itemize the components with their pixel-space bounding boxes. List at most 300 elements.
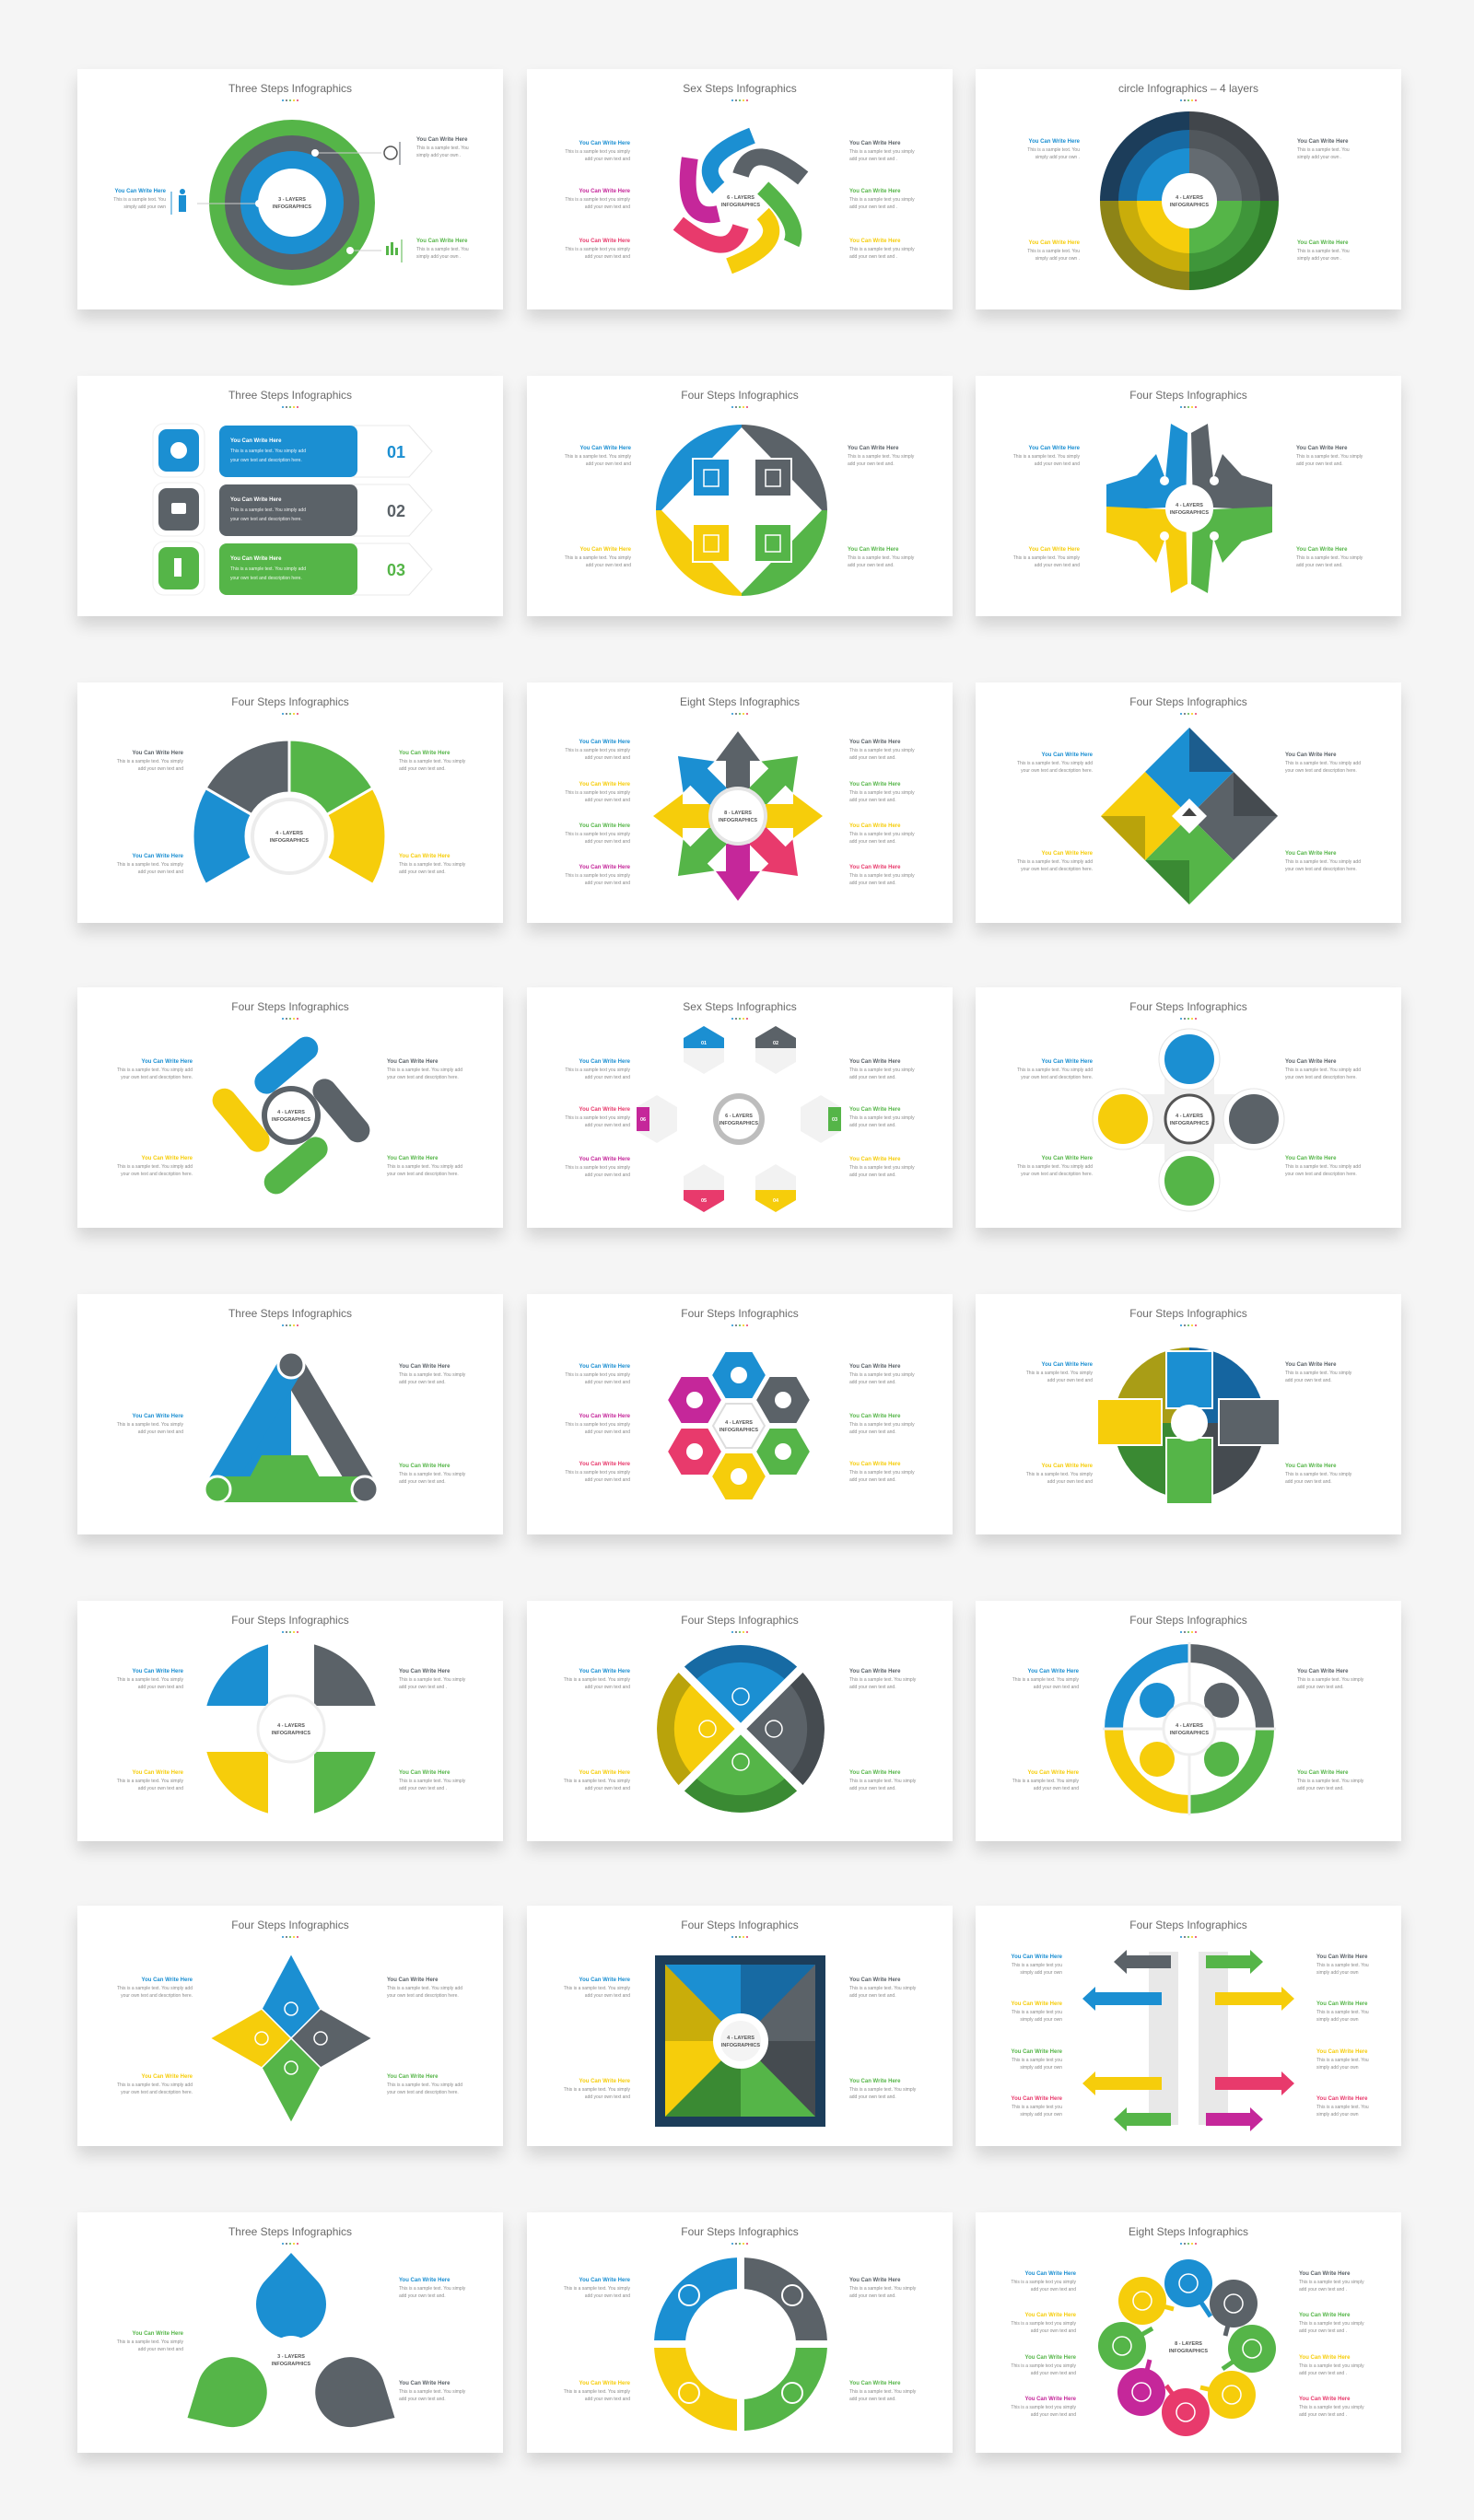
text blocks right: This is a sample text. You: [1316, 2058, 1369, 2063]
text blocks right: You Can Write Here: [387, 1156, 439, 1161]
title: [683, 82, 797, 101]
text blocks right: You Can Write Here: [387, 2074, 439, 2080]
ring chart: [197, 120, 381, 286]
pinwheel chart: [1106, 424, 1272, 593]
hexagon chart: 04: [773, 1198, 779, 1204]
text blocks right: your own text and description here.: [387, 1075, 459, 1080]
donut chart: INFOGRAPHICS: [270, 838, 309, 844]
text blocks right: your own text and description here.: [1285, 867, 1357, 872]
text blocks right: add your own text and.: [849, 1477, 896, 1483]
text blocks left: [565, 740, 631, 886]
text blocks right: add your own text and.: [1285, 1378, 1332, 1383]
title: [228, 389, 352, 408]
title: Three Steps Infographics: [228, 1307, 352, 1320]
text blocks left: [564, 2278, 631, 2402]
text blocks left: You Can Write Here: [1029, 547, 1081, 553]
donut chart: INFOGRAPHICS: [1170, 1731, 1209, 1736]
text blocks right: This is a sample text. You simply add: [387, 1164, 462, 1170]
text blocks right: You Can Write Here: [399, 1770, 450, 1776]
pills chart: INFOGRAPHICS: [272, 1117, 310, 1123]
step 3: [153, 542, 432, 595]
text blocks right: This is a sample text. You simply: [399, 1472, 466, 1477]
text blocks left: add your own text and: [138, 869, 183, 875]
text blocks left: This is a sample text. You simply: [565, 555, 631, 561]
slide 22: three drops: [77, 2212, 503, 2453]
text blocks right: add your own text and .: [1299, 2371, 1347, 2376]
text blocks right: add your own text and.: [1296, 461, 1343, 467]
text blocks right: This is a sample text you simply: [849, 149, 915, 155]
title: [1129, 1307, 1247, 1326]
text blocks right: This is a sample text. You simply: [849, 1677, 917, 1683]
text blocks left: You Can Write Here: [1028, 1770, 1080, 1776]
title: [1129, 2225, 1248, 2245]
text blocks left: This is a sample text. You simply: [564, 2389, 630, 2395]
donut chart: [193, 740, 386, 884]
hexagon chart: INFOGRAPHICS: [719, 1121, 758, 1126]
text blocks right: [849, 1364, 915, 1483]
text blocks left: [564, 1669, 631, 1791]
text blocks right: simply add your own: [1316, 1970, 1359, 1976]
text blocks right: You Can Write Here: [387, 1059, 439, 1065]
title: Four Steps Infographics: [231, 1614, 349, 1627]
text blocks left: add your own text and: [138, 1685, 183, 1690]
text blocks right: You Can Write Here: [849, 2079, 901, 2084]
slide 18: donut with circles: [976, 1601, 1401, 1841]
text blocks left: This is a sample text you simply: [565, 1068, 630, 1073]
text blocks left: This is a sample text. You simply add: [1017, 859, 1093, 865]
title: [228, 1307, 352, 1326]
text blocks left: This is a sample text you simply: [565, 149, 630, 155]
text blocks right: This is a sample text. You simply: [848, 454, 915, 460]
title: [681, 1307, 799, 1326]
text blocks left: You Can Write Here: [142, 1156, 193, 1161]
text blocks right: You Can Write Here: [849, 1669, 901, 1674]
petals chart: 4 - LAYERS: [277, 1723, 305, 1729]
donut chart: [650, 2254, 831, 2434]
text blocks right: This is a sample text. You simply: [849, 2087, 917, 2093]
text blocks right: add your own text and.: [849, 1429, 896, 1435]
text blocks left: add your own text and: [585, 157, 630, 162]
text blocks right: You Can Write Here: [399, 1669, 450, 1674]
text blocks left: This is a sample text you simply: [565, 1165, 630, 1171]
text blocks left: your own text and description here.: [121, 1993, 193, 1999]
text blocks right: You Can Write Here: [848, 446, 899, 451]
text blocks left: You Can Write Here: [579, 1770, 631, 1776]
step 3: 03: [387, 561, 405, 579]
text blocks right: add your own text and.: [1297, 1685, 1344, 1690]
text blocks right: This is a sample text you simply: [849, 1372, 915, 1378]
text blocks right: This is a sample text. You: [1316, 2010, 1369, 2015]
text blocks right: add your own text and.: [849, 798, 896, 803]
text blocks right: This is a sample text. You: [1297, 147, 1350, 153]
text blocks right: You Can Write Here: [849, 1978, 901, 1983]
pills chart: [207, 1032, 375, 1199]
text blocks right: You Can Write Here: [1316, 1954, 1368, 1960]
swirl chart: 6 - LAYERS: [727, 195, 755, 201]
text blocks left: add your own text and: [585, 2397, 630, 2402]
text blocks right: You Can Write Here: [1299, 2313, 1351, 2318]
text blocks right: add your own text and.: [849, 881, 896, 886]
text blocks right: This is a sample text. You simply add: [1285, 761, 1361, 766]
hexagon chart: 06: [640, 1117, 646, 1123]
text blocks right: You Can Write Here: [849, 740, 901, 745]
text blocks right: You Can Write Here: [1297, 139, 1349, 145]
text blocks left: [1011, 2271, 1077, 2418]
text blocks right: This is a sample text. You simply add: [1285, 859, 1361, 865]
title: Eight Steps Infographics: [1129, 2225, 1248, 2238]
text blocks right: [1316, 1954, 1369, 2118]
text blocks right: You Can Write Here: [849, 1364, 901, 1370]
text blocks left: your own text and description here.: [1021, 1075, 1093, 1080]
text blocks right: This is a sample text you simply: [849, 748, 915, 753]
title: Sex Steps Infographics: [683, 82, 797, 95]
text blocks left: You Can Write Here: [1012, 2096, 1063, 2102]
text blocks right: This is a sample text you simply: [1299, 2280, 1364, 2285]
arrows chart: INFOGRAPHICS: [719, 818, 757, 823]
text blocks left: add your own text and: [585, 2293, 630, 2299]
text blocks right: add your own text and.: [1297, 1786, 1344, 1791]
cross circle chart: [1097, 1348, 1280, 1504]
title: [1129, 1919, 1247, 1938]
arrows chart: 8 - LAYERS: [724, 811, 752, 816]
text blocks right: This is a sample text you simply: [849, 790, 915, 796]
layered quadrant chart: [1100, 111, 1279, 290]
title: [680, 695, 800, 715]
text blocks left: This is a sample text you simply: [565, 1422, 630, 1428]
text block right top: You Can Write Here: [416, 137, 468, 143]
text blocks left: This is a sample text. You simply: [117, 1779, 183, 1784]
text blocks right: add your own text and.: [399, 869, 446, 875]
text blocks left: You Can Write Here: [133, 1669, 184, 1674]
title: Three Steps Infographics: [228, 82, 352, 95]
title: Four Steps Infographics: [681, 2225, 799, 2238]
text block right top: This is a sample text. You: [416, 146, 469, 151]
text blocks right: This is a sample text you simply: [849, 1470, 915, 1476]
text blocks left: This is a sample text you simply: [1011, 2321, 1076, 2327]
slide 24: eight bubbles: [976, 2212, 1401, 2453]
text block left: This is a sample text. You simply: [117, 1422, 183, 1428]
text blocks right: simply add your own .: [1297, 256, 1341, 262]
text blocks right: This is a sample text. You: [1316, 2105, 1369, 2110]
step 3: your own text and description here.: [230, 576, 302, 581]
text blocks right: You Can Write Here: [1297, 1669, 1349, 1674]
text blocks right: You Can Write Here: [1297, 240, 1349, 246]
text blocks right: [849, 1978, 917, 2100]
text blocks left: simply add your own: [1020, 1970, 1062, 1976]
text blocks left: You Can Write Here: [1042, 752, 1094, 758]
text blocks left: add your own text and: [586, 461, 631, 467]
text block left: This is a sample text. You: [113, 197, 166, 203]
title: [228, 82, 352, 101]
text blocks right: You Can Write Here: [849, 782, 901, 788]
slide 11: six hexagons: [527, 987, 953, 1228]
star chart: [210, 1954, 372, 2123]
text blocks left: You Can Write Here: [1042, 1156, 1094, 1161]
text blocks left: You Can Write Here: [579, 1669, 631, 1674]
text blocks right: You Can Write Here: [849, 1414, 901, 1419]
text blocks left: You Can Write Here: [1029, 446, 1081, 451]
donut chart: 4 - LAYERS: [1176, 1723, 1203, 1729]
text blocks right: add your own text and.: [848, 461, 895, 467]
text blocks left: [1017, 1059, 1094, 1177]
title: [681, 2225, 799, 2245]
text blocks right: This is a sample text you simply: [1299, 2363, 1364, 2369]
text blocks left: You Can Write Here: [579, 1978, 631, 1983]
title: [1129, 1614, 1247, 1633]
text blocks right: This is a sample text you simply: [1299, 2405, 1364, 2410]
text blocks left: add your own text and: [586, 563, 631, 568]
honeycomb chart: INFOGRAPHICS: [719, 1428, 758, 1433]
text blocks right: add your own text and.: [849, 1075, 896, 1080]
text blocks right: This is a sample text. You simply: [399, 1779, 466, 1784]
text blocks left: your own text and description here.: [121, 1075, 193, 1080]
square chart: 4 - LAYERS: [727, 2036, 755, 2041]
text blocks left: You Can Write Here: [1025, 2271, 1077, 2277]
diamond chart: [1101, 728, 1278, 904]
text blocks right: You Can Write Here: [399, 854, 450, 859]
text blocks right: This is a sample text. You: [1297, 249, 1350, 254]
X circle chart: [657, 1645, 825, 1813]
text blocks right: This is a sample text you simply: [849, 1068, 915, 1073]
text block left: add your own text and: [138, 1429, 183, 1435]
text blocks left: add your own text and: [1034, 1786, 1079, 1791]
pills chart: 4 - LAYERS: [277, 1110, 305, 1115]
text blocks right: You Can Write Here: [1316, 2049, 1368, 2055]
step 2: 02: [387, 502, 405, 520]
text blocks left: add your own text and: [1031, 2371, 1076, 2376]
text blocks right: You Can Write Here: [849, 1059, 901, 1065]
text blocks left: This is a sample text. You: [1027, 249, 1080, 254]
title: [681, 1614, 799, 1633]
text blocks left: [1017, 752, 1094, 872]
title: [228, 2225, 352, 2245]
text blocks right: This is a sample text. You simply: [399, 862, 466, 868]
text blocks left: your own text and description here.: [1021, 768, 1093, 774]
slide 14: honeycomb: [527, 1294, 953, 1534]
text blocks left: [565, 446, 632, 568]
text blocks left: This is a sample text. You simply: [564, 1779, 630, 1784]
text blocks right: This is a sample text. You simply: [399, 1677, 466, 1683]
text blocks right: [1285, 1362, 1352, 1485]
title: Four Steps Infographics: [1129, 389, 1247, 402]
text blocks left: This is a sample text you: [1012, 2058, 1062, 2063]
text block left: [117, 1414, 184, 1435]
text blocks left: add your own text and: [1035, 563, 1080, 568]
title: Four Steps Infographics: [1129, 695, 1247, 708]
text blocks left: This is a sample text. You simply: [565, 454, 631, 460]
slide 23: donut quadrants: [527, 2212, 953, 2453]
text blocks right: This is a sample text. You simply: [1296, 555, 1363, 561]
text blocks right: [399, 2278, 466, 2402]
text blocks left: You Can Write Here: [579, 1157, 631, 1162]
text block right top: simply add your own .: [416, 153, 461, 158]
circles chart: 4 - LAYERS: [1176, 1114, 1203, 1119]
text blocks right: This is a sample text. You simply: [849, 2286, 917, 2292]
text blocks right: This is a sample text. You simply: [399, 1372, 466, 1378]
text blocks right: You Can Write Here: [849, 865, 901, 870]
text blocks right: You Can Write Here: [1285, 1362, 1337, 1368]
text blocks left: You Can Write Here: [1042, 1059, 1094, 1065]
text blocks left: add your own text and: [585, 204, 630, 210]
text blocks right: add your own text and .: [849, 157, 897, 162]
slide 16: petals: [77, 1601, 503, 1841]
text blocks right: add your own text and.: [849, 839, 896, 845]
text blocks left: You Can Write Here: [1042, 1464, 1094, 1469]
text blocks left: This is a sample text you simply: [565, 247, 630, 252]
petals chart: INFOGRAPHICS: [272, 1731, 310, 1736]
text blocks left: You Can Write Here: [133, 854, 184, 859]
text block right bottom: [416, 239, 469, 260]
text blocks left: add your own text and: [585, 798, 630, 803]
text blocks left: add your own text and: [585, 1075, 630, 1080]
text blocks right: your own text and description here.: [387, 1172, 459, 1177]
text blocks right: You Can Write Here: [1285, 1156, 1337, 1161]
text blocks left: This is a sample text you simply: [565, 832, 630, 837]
text blocks right: [849, 1669, 917, 1791]
text blocks right: This is a sample text you simply: [849, 1115, 915, 1121]
bubbles chart: 8 - LAYERS: [1175, 2341, 1202, 2347]
arrows chart: [1082, 1950, 1294, 2131]
title: [231, 1000, 349, 1020]
text blocks right: You Can Write Here: [387, 1978, 439, 1983]
title: [231, 1919, 349, 1938]
icon: chart: [386, 239, 402, 262]
slide 5: four steps lens circle: [527, 376, 953, 616]
slide 8: eight arrows: [527, 682, 953, 923]
text blocks left: You Can Write Here: [579, 823, 631, 829]
text blocks right: You Can Write Here: [849, 1157, 901, 1162]
text blocks right: You Can Write Here: [848, 547, 899, 553]
drops chart: [170, 2253, 412, 2448]
text blocks left: You Can Write Here: [133, 1770, 184, 1776]
text block left: You Can Write Here: [133, 1414, 184, 1419]
title: Four Steps Infographics: [1129, 1614, 1247, 1627]
circles chart: [1093, 1029, 1284, 1211]
text blocks right: You Can Write Here: [849, 1770, 901, 1776]
text blocks right: add your own text and.: [849, 1786, 896, 1791]
slide 6: pinwheel arrows: [976, 376, 1401, 616]
text blocks right: You Can Write Here: [1296, 446, 1348, 451]
text blocks right: add your own text and.: [849, 1685, 896, 1690]
drops chart: INFOGRAPHICS: [272, 2362, 310, 2367]
text blocks right: You Can Write Here: [399, 751, 450, 756]
text blocks right: This is a sample text you simply: [849, 1422, 915, 1428]
text blocks left: This is a sample text you simply: [565, 790, 630, 796]
text blocks left: [1012, 1954, 1063, 2118]
text blocks left: [1026, 1362, 1094, 1485]
text blocks right: You Can Write Here: [399, 1364, 450, 1370]
text blocks right: You Can Write Here: [849, 189, 901, 194]
text blocks left: [565, 1059, 631, 1178]
text blocks left: This is a sample text. You simply: [564, 2286, 630, 2292]
step 1: 01: [387, 443, 405, 461]
petals chart: [197, 1638, 385, 1822]
text blocks right: add your own text and.: [1296, 563, 1343, 568]
text blocks right: You Can Write Here: [399, 2278, 450, 2283]
slide 9: diamond: [976, 682, 1401, 923]
step 1: [153, 424, 432, 477]
text blocks left: You Can Write Here: [579, 2079, 631, 2084]
text blocks left: This is a sample text you simply: [1011, 2363, 1076, 2369]
text blocks right: add your own text and.: [849, 755, 896, 761]
text blocks left: This is a sample text. You simply add: [117, 1986, 193, 1991]
title: Four Steps Infographics: [681, 1919, 799, 1931]
text blocks left: add your own text and: [585, 881, 630, 886]
text blocks right: add your own text and.: [849, 2293, 896, 2299]
text blocks right: [1297, 139, 1350, 262]
text blocks left: simply add your own: [1020, 2112, 1062, 2118]
hexagon chart: 03: [832, 1117, 837, 1123]
text blocks left: You Can Write Here: [579, 2278, 631, 2283]
slide 1: three layer rings: [77, 69, 503, 309]
bubbles chart: [1098, 2259, 1276, 2436]
text blocks left: You Can Write Here: [1042, 1362, 1094, 1368]
title: Four Steps Infographics: [1129, 1000, 1247, 1013]
text blocks right: You Can Write Here: [1299, 2355, 1351, 2361]
text blocks left: simply add your own .: [1035, 155, 1080, 160]
text blocks left: [565, 141, 631, 260]
text blocks right: [399, 1669, 466, 1791]
text blocks right: add your own text and .: [399, 1685, 447, 1690]
title: [1129, 695, 1247, 715]
text blocks left: This is a sample text. You simply: [564, 1677, 630, 1683]
text blocks left: This is a sample text. You simply add: [1017, 1068, 1093, 1073]
text blocks left: You Can Write Here: [579, 189, 631, 194]
donut chart: [1103, 1642, 1276, 1815]
text blocks right: [387, 1059, 462, 1177]
title: Four Steps Infographics: [231, 1919, 349, 1931]
text blocks right: You Can Write Here: [1285, 752, 1337, 758]
text blocks right: your own text and description here.: [1285, 768, 1357, 774]
text block right bottom: You Can Write Here: [416, 239, 468, 244]
text blocks left: [1013, 446, 1081, 568]
text blocks right: This is a sample text you simply: [849, 197, 915, 203]
text blocks left: simply add your own: [1020, 2065, 1062, 2071]
step 1: your own text and description here.: [230, 458, 302, 463]
text blocks left: This is a sample text. You simply: [1026, 1472, 1093, 1477]
text block right bottom: simply add your own .: [416, 254, 461, 260]
text blocks right: This is a sample text. You simply: [399, 2389, 466, 2395]
text blocks right: You Can Write Here: [1316, 2001, 1368, 2007]
text blocks left: add your own text and: [585, 839, 630, 845]
text blocks right: This is a sample text. You simply add: [1285, 1164, 1361, 1170]
text blocks right: This is a sample text. You simply: [1297, 1677, 1364, 1683]
text blocks left: add your own text and: [1034, 1685, 1079, 1690]
text blocks right: This is a sample text. You simply: [848, 555, 915, 561]
text blocks right: This is a sample text you simply: [1299, 2321, 1364, 2327]
text blocks right: your own text and description here.: [387, 1993, 459, 1999]
title: [683, 1000, 797, 1020]
text blocks left: [564, 1978, 631, 2100]
text blocks left: [117, 1669, 184, 1791]
swirl chart: [678, 135, 803, 266]
text blocks right: [849, 1059, 915, 1178]
text blocks left: You Can Write Here: [579, 2381, 631, 2386]
text blocks right: You Can Write Here: [399, 1464, 450, 1469]
title: Eight Steps Infographics: [680, 695, 800, 708]
text blocks left: This is a sample text you simply: [1011, 2280, 1076, 2285]
text blocks right: This is a sample text. You simply add: [387, 1068, 462, 1073]
text blocks left: You Can Write Here: [1025, 2313, 1077, 2318]
text blocks right: add your own text and.: [399, 766, 446, 772]
text blocks left: add your own text and: [585, 1477, 630, 1483]
text blocks left: [565, 1364, 631, 1483]
text blocks right: You Can Write Here: [849, 141, 901, 146]
text blocks right: You Can Write Here: [849, 823, 901, 829]
text blocks left: You Can Write Here: [1012, 2001, 1063, 2007]
text blocks left: This is a sample text. You simply: [1012, 1779, 1079, 1784]
text blocks right: You Can Write Here: [1299, 2271, 1351, 2277]
